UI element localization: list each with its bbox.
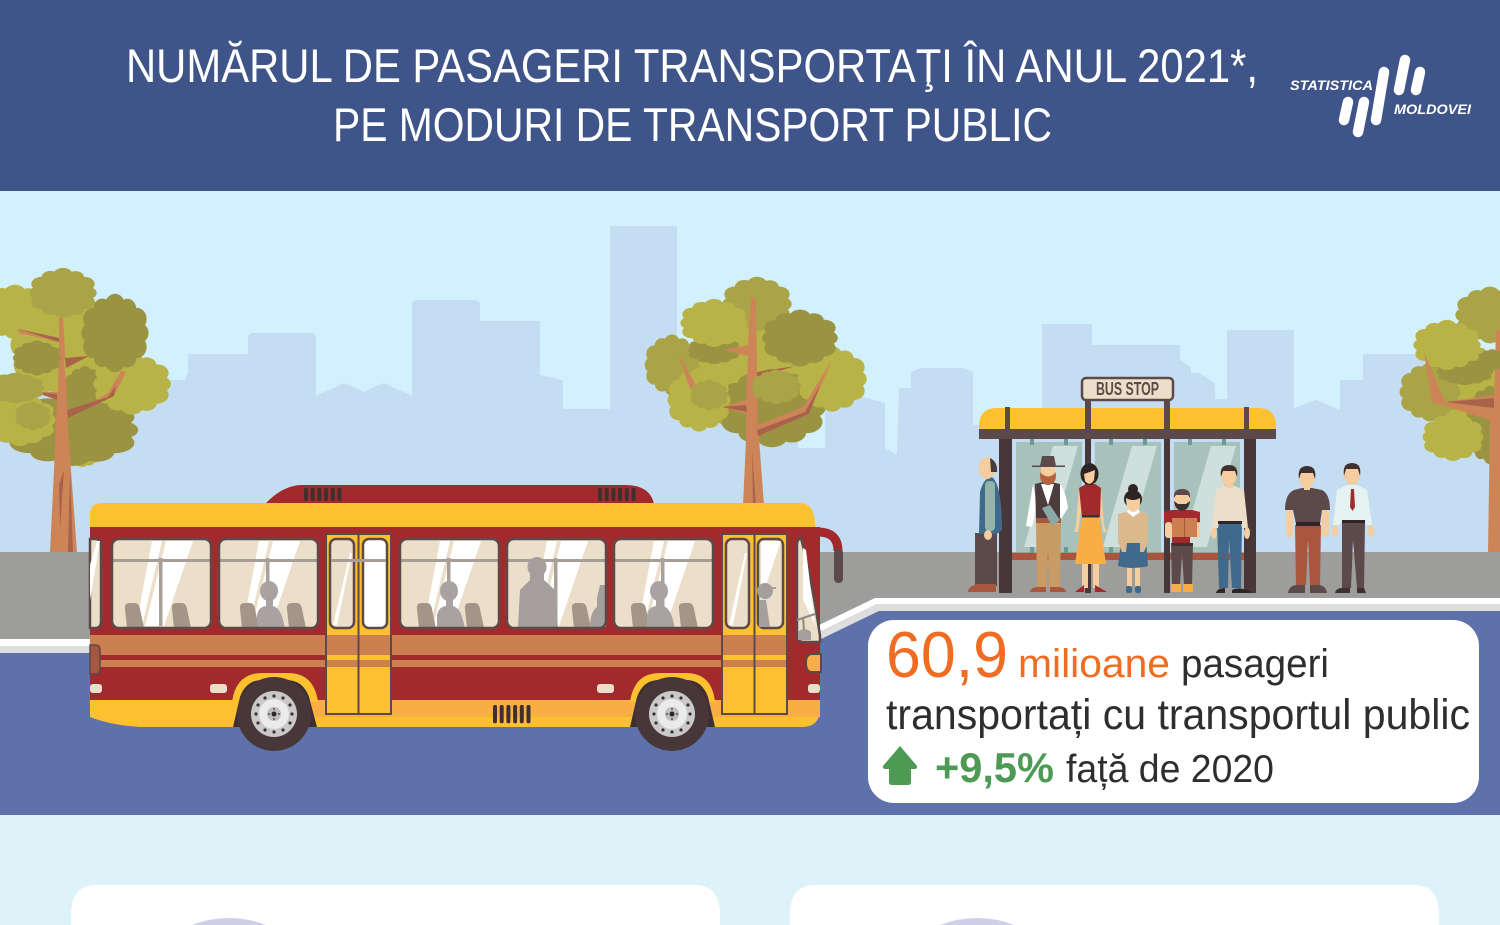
person: woman in orange skirt bbox=[1074, 463, 1107, 592]
window 5 with passenger bbox=[614, 539, 713, 628]
mirror bbox=[803, 532, 843, 583]
callout: total passengers bbox=[868, 618, 1479, 803]
sign: bus stop bbox=[1082, 378, 1173, 400]
person: seated man reading bbox=[1164, 489, 1200, 592]
road and pavement bbox=[0, 552, 1500, 815]
person: man in dark t-shirt bbox=[1285, 466, 1330, 593]
people waiting bbox=[968, 456, 1374, 593]
window 2 with passenger bbox=[219, 539, 318, 628]
sign: bus stop: BUS STOP bbox=[1096, 379, 1159, 399]
window 3 with passenger bbox=[400, 539, 499, 628]
person: girl in blue skirt bbox=[1118, 484, 1148, 593]
window partial left bbox=[90, 539, 101, 628]
door 1 bbox=[326, 534, 391, 714]
wheel left bbox=[232, 673, 318, 751]
tree centre bbox=[645, 277, 867, 505]
callout: total passengers: pasageri bbox=[1181, 642, 1329, 686]
callout: total passengers: milioane bbox=[1018, 642, 1170, 686]
logo: Statistica Moldovei bbox=[1290, 60, 1472, 132]
city skyline bbox=[0, 226, 1500, 556]
person: man in cream shirt bbox=[1211, 465, 1251, 593]
title: PE MODURI DE TRANSPORT PUBLIC bbox=[333, 98, 1052, 151]
door 2 bbox=[722, 534, 787, 714]
sky bbox=[0, 191, 1500, 556]
wheel right bbox=[630, 673, 715, 751]
panel: bottom right card bbox=[790, 885, 1439, 925]
callout: total passengers: transportați cu transportul public bbox=[886, 691, 1470, 739]
bus stop shelter bbox=[979, 378, 1276, 593]
header band bbox=[0, 0, 1500, 191]
person: man with red tie bbox=[1332, 463, 1374, 593]
bus bbox=[90, 485, 843, 751]
glass panels bbox=[1016, 439, 1240, 553]
vents lower bbox=[493, 705, 530, 723]
lights bbox=[90, 645, 821, 693]
tree right bbox=[1400, 287, 1500, 552]
title: NUMĂRUL DE PASAGERI TRANSPORTAŢI ÎN ANUL 2021*, bbox=[126, 39, 1258, 92]
window 1 bbox=[112, 539, 211, 628]
windscreen bbox=[797, 538, 820, 642]
key figure: 60,9 bbox=[886, 618, 1008, 691]
person: old man bbox=[968, 457, 1002, 592]
lower background bbox=[0, 815, 1500, 925]
icon: up arrow bbox=[883, 746, 917, 785]
panel: bottom left card bbox=[71, 885, 720, 925]
person: man with hat bbox=[1026, 456, 1068, 592]
tree left bbox=[0, 268, 171, 552]
title bbox=[126, 39, 1258, 151]
callout: total passengers: față de 2020 bbox=[1066, 748, 1274, 791]
body bbox=[90, 503, 820, 727]
logo: Statistica Moldovei: MOLDOVEI bbox=[1394, 101, 1472, 117]
window 4 with standing passenger bbox=[507, 539, 606, 628]
roof hump bbox=[265, 485, 654, 504]
logo: Statistica Moldovei: STATISTICA bbox=[1290, 77, 1373, 93]
callout: total passengers: +9,5% bbox=[935, 744, 1054, 791]
